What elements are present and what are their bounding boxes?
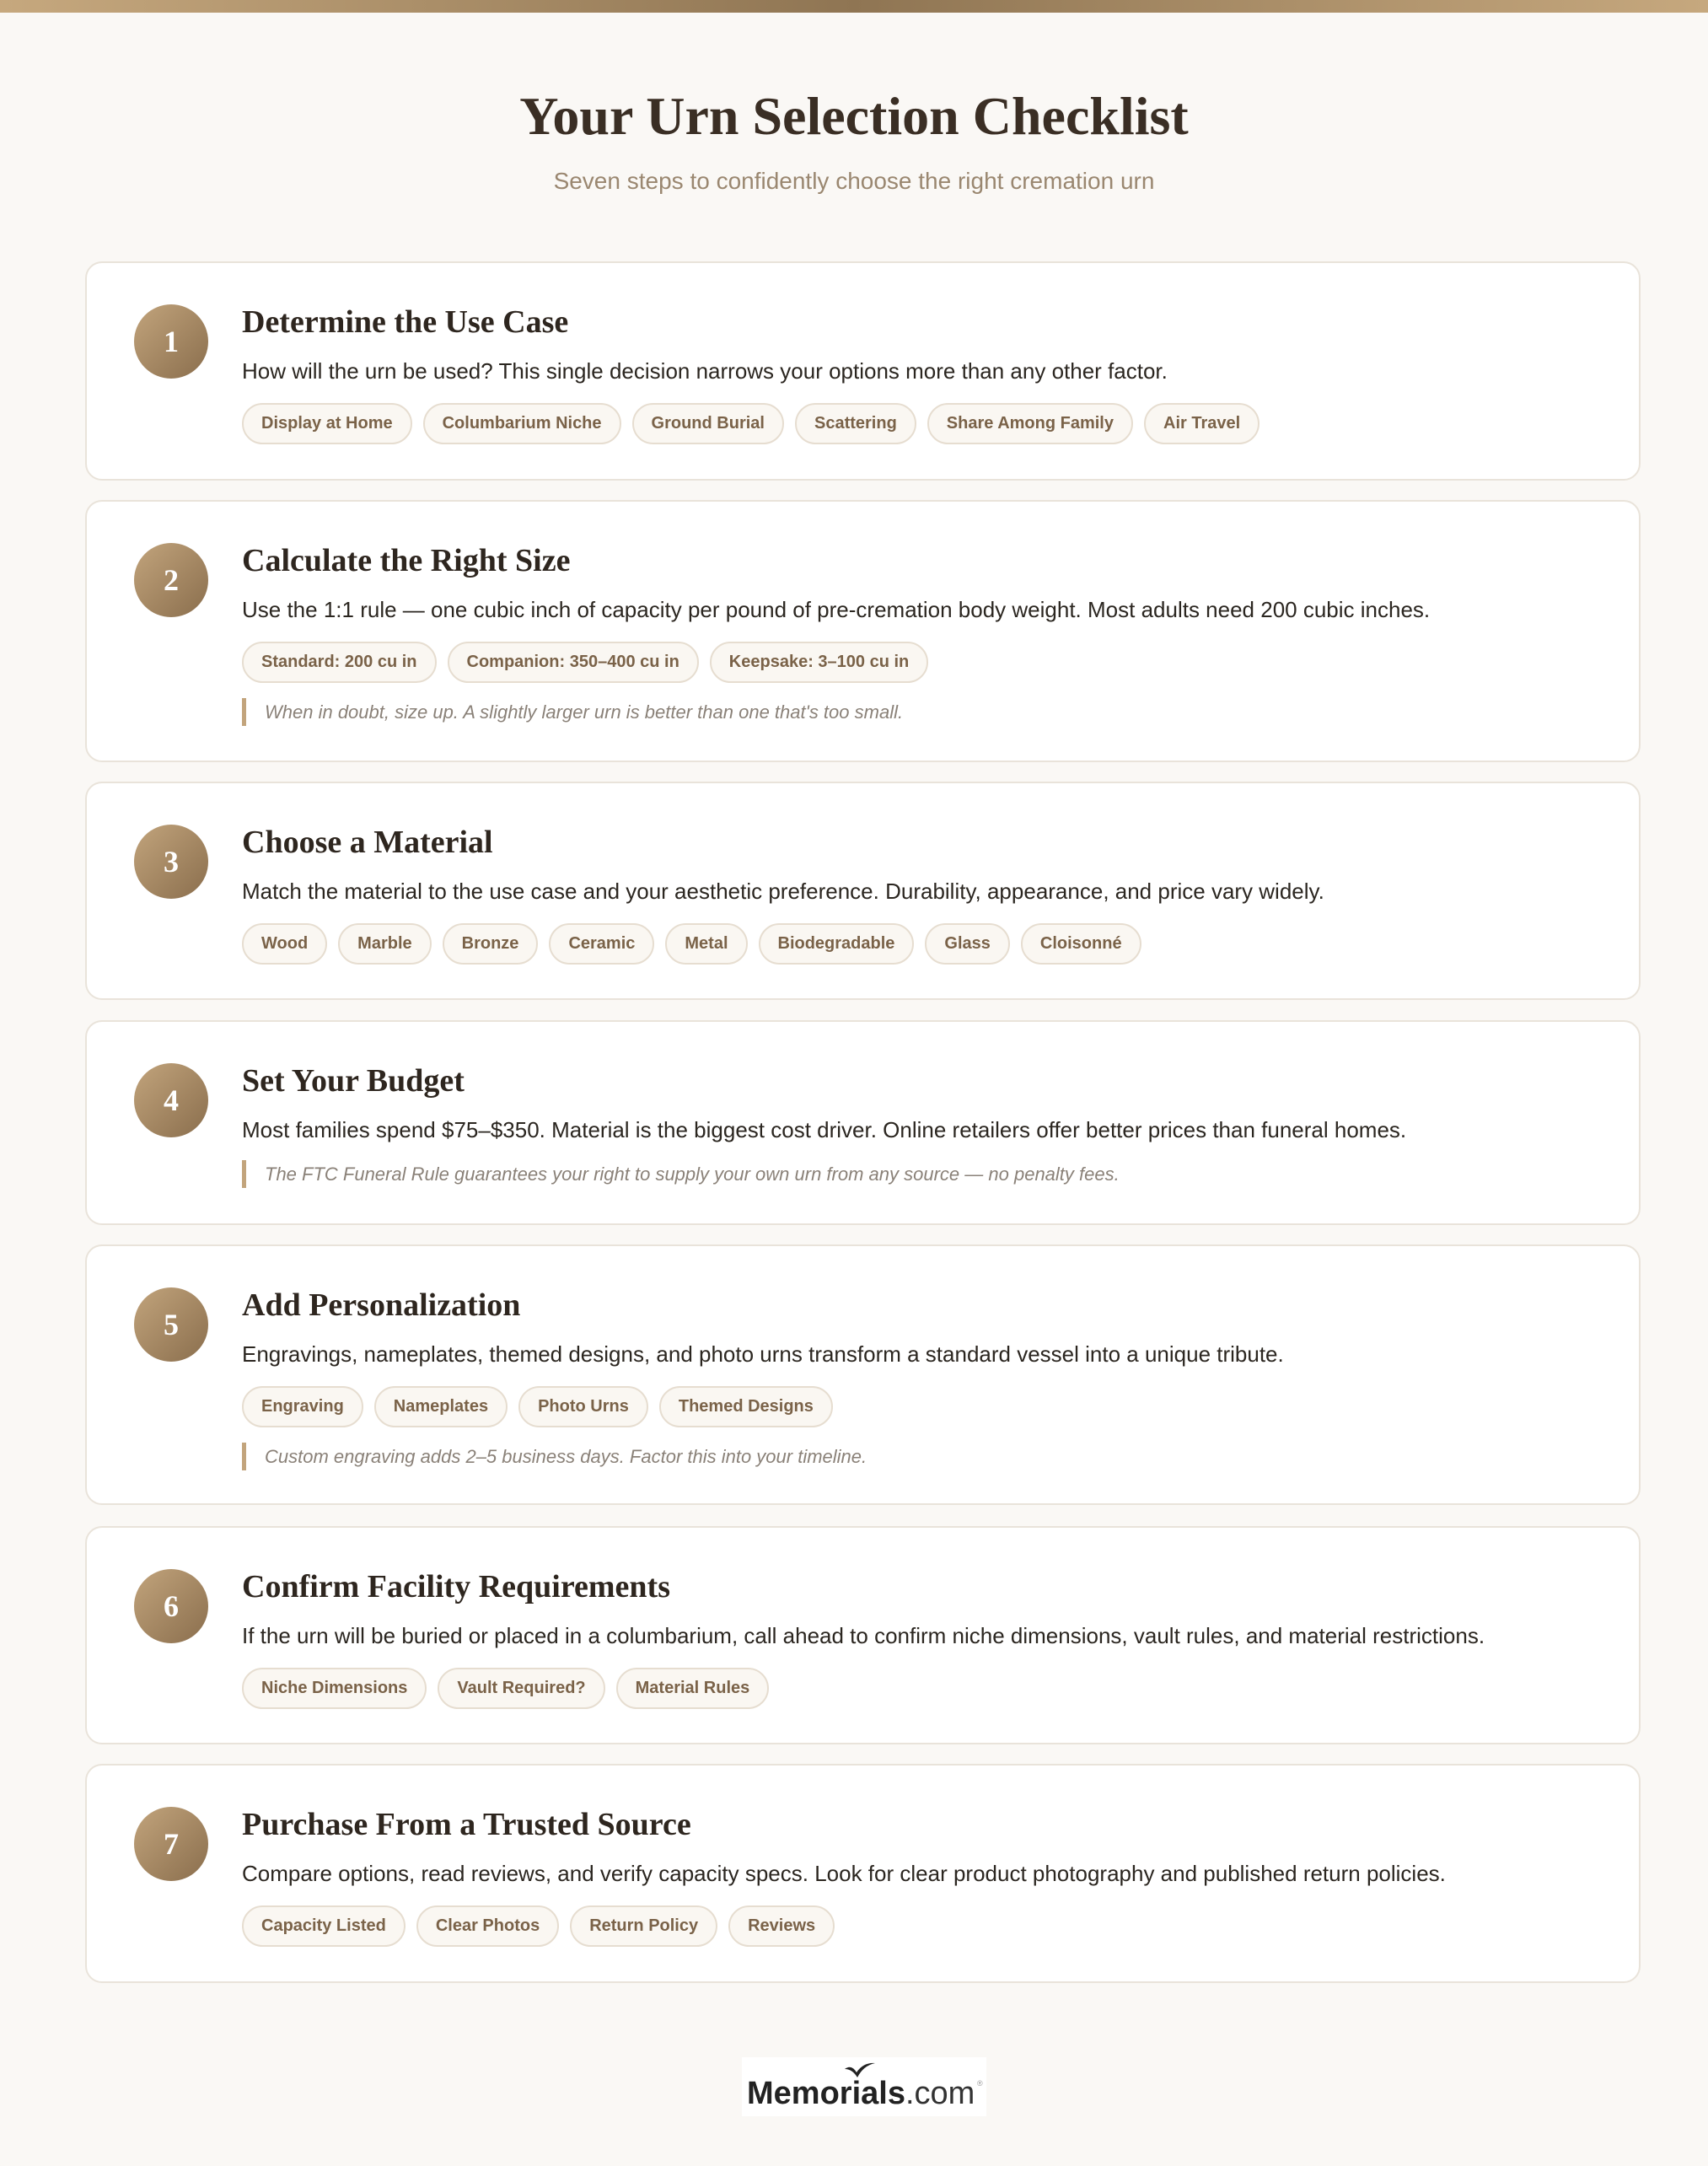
tags 5: Nameplates [394,1397,488,1416]
note 5 [242,1443,1605,1470]
tags 2 [242,642,928,683]
tags 1: Columbarium Niche [443,414,602,433]
tags 3: Cloisonné [1040,934,1122,953]
panel: step 5 [85,1244,1641,1505]
badge 2: 2 [164,563,179,597]
note 5: Custom engraving adds 2–5 business days. Factor this into your timeline. [265,1446,867,1467]
tags 2: Companion: 350–400 cu in [467,653,679,671]
description 7: Compare options, read reviews, and verify capacity specs. Look for clear product photography and published return policies. [242,1861,1446,1886]
panel: step 2 [85,500,1641,762]
tags 5: Themed Designs [679,1397,814,1416]
tags 7: Return Policy [589,1916,698,1935]
tags 5: Engraving [261,1397,344,1416]
tags 5 [242,1386,833,1427]
tags 1: Scattering [814,414,897,433]
heading 3: Choose a Material [242,825,493,860]
tags 1: Air Travel [1163,414,1240,433]
badge 1: 1 [164,325,179,358]
badge 6: 6 [164,1589,179,1623]
tags 7: Capacity Listed [261,1916,386,1935]
badge 3 [134,825,208,899]
tags 3: Biodegradable [777,934,894,953]
tags 6: Material Rules [636,1679,749,1697]
tags 1: Share Among Family [947,414,1114,433]
tags 2: Standard: 200 cu in [261,653,416,671]
badge 7: 7 [164,1827,179,1861]
tags 1: Ground Burial [652,414,765,433]
title: Your Urn Selection Checklist [519,86,1189,146]
panel: step 6 [85,1526,1641,1744]
badge 5: 5 [164,1308,179,1341]
heading 6: Confirm Facility Requirements [242,1569,670,1604]
panel: step 4 [85,1020,1641,1225]
tags 1 [242,403,1260,444]
heading 2: Calculate the Right Size [242,543,570,578]
description 2: Use the 1:1 rule — one cubic inch of capacity per pound of pre-cremation body weight. Most adults need 200 cubic inches. [242,597,1430,622]
heading 5: Add Personalization [242,1287,520,1323]
tags 7: Reviews [748,1916,815,1935]
tags 3: Ceramic [568,934,635,953]
top bar [0,0,1708,13]
badge 4 [134,1063,208,1137]
panel: step 3 [85,782,1641,1000]
footer logo: Memorials.com [747,2076,975,2111]
badge 1 [134,304,208,379]
tags 3 [242,923,1141,965]
note 4: The FTC Funeral Rule guarantees your right to supply your own urn from any source — no penalty fees. [265,1164,1120,1185]
tags 7: Clear Photos [436,1916,540,1935]
heading 1: Determine the Use Case [242,304,568,340]
footer logo: ® [977,2079,983,2088]
tags 1: Display at Home [261,414,393,433]
tags 5: Photo Urns [538,1397,629,1416]
tags 3: Metal [685,934,728,953]
subtitle: Seven steps to confidently choose the right cremation urn [554,168,1154,194]
badge 3: 3 [164,845,179,879]
description 1: How will the urn be used? This single decision narrows your options more than any other factor. [242,358,1168,384]
description 6: If the urn will be buried or placed in a columbarium, call ahead to confirm niche dimensions, vault rules, and material restrictions. [242,1623,1485,1648]
note 4 [242,1160,1605,1188]
heading 7: Purchase From a Trusted Source [242,1807,691,1842]
panel: step 1 [85,261,1641,481]
tags 7 [242,1905,835,1947]
tags 6: Vault Required? [457,1679,586,1697]
tags 3: Marble [357,934,412,953]
tags 6: Niche Dimensions [261,1679,407,1697]
heading 4: Set Your Budget [242,1063,465,1099]
description 3: Match the material to the use case and your aesthetic preference. Durability, appearance, and price vary widely. [242,879,1324,904]
badge 6 [134,1569,208,1643]
note 2: When in doubt, size up. A slightly larger urn is better than one that's too small. [265,701,903,723]
badge 7 [134,1807,208,1881]
description 4: Most families spend $75–$350. Material is the biggest cost driver. Online retailers offer better prices than funeral homes. [242,1117,1406,1142]
tags 2: Keepsake: 3–100 cu in [729,653,909,671]
badge 5 [134,1287,208,1362]
badge 4: 4 [164,1083,179,1117]
tags 3: Bronze [462,934,518,953]
tags 3: Wood [261,934,308,953]
footer logo [742,2057,986,2116]
tags 3: Glass [944,934,991,953]
description 5: Engravings, nameplates, themed designs, and photo urns transform a standard vessel into a unique tribute. [242,1341,1284,1367]
badge 2 [134,543,208,617]
panel: step 7 [85,1764,1641,1983]
note 2 [242,698,1605,726]
tags 6 [242,1668,769,1709]
